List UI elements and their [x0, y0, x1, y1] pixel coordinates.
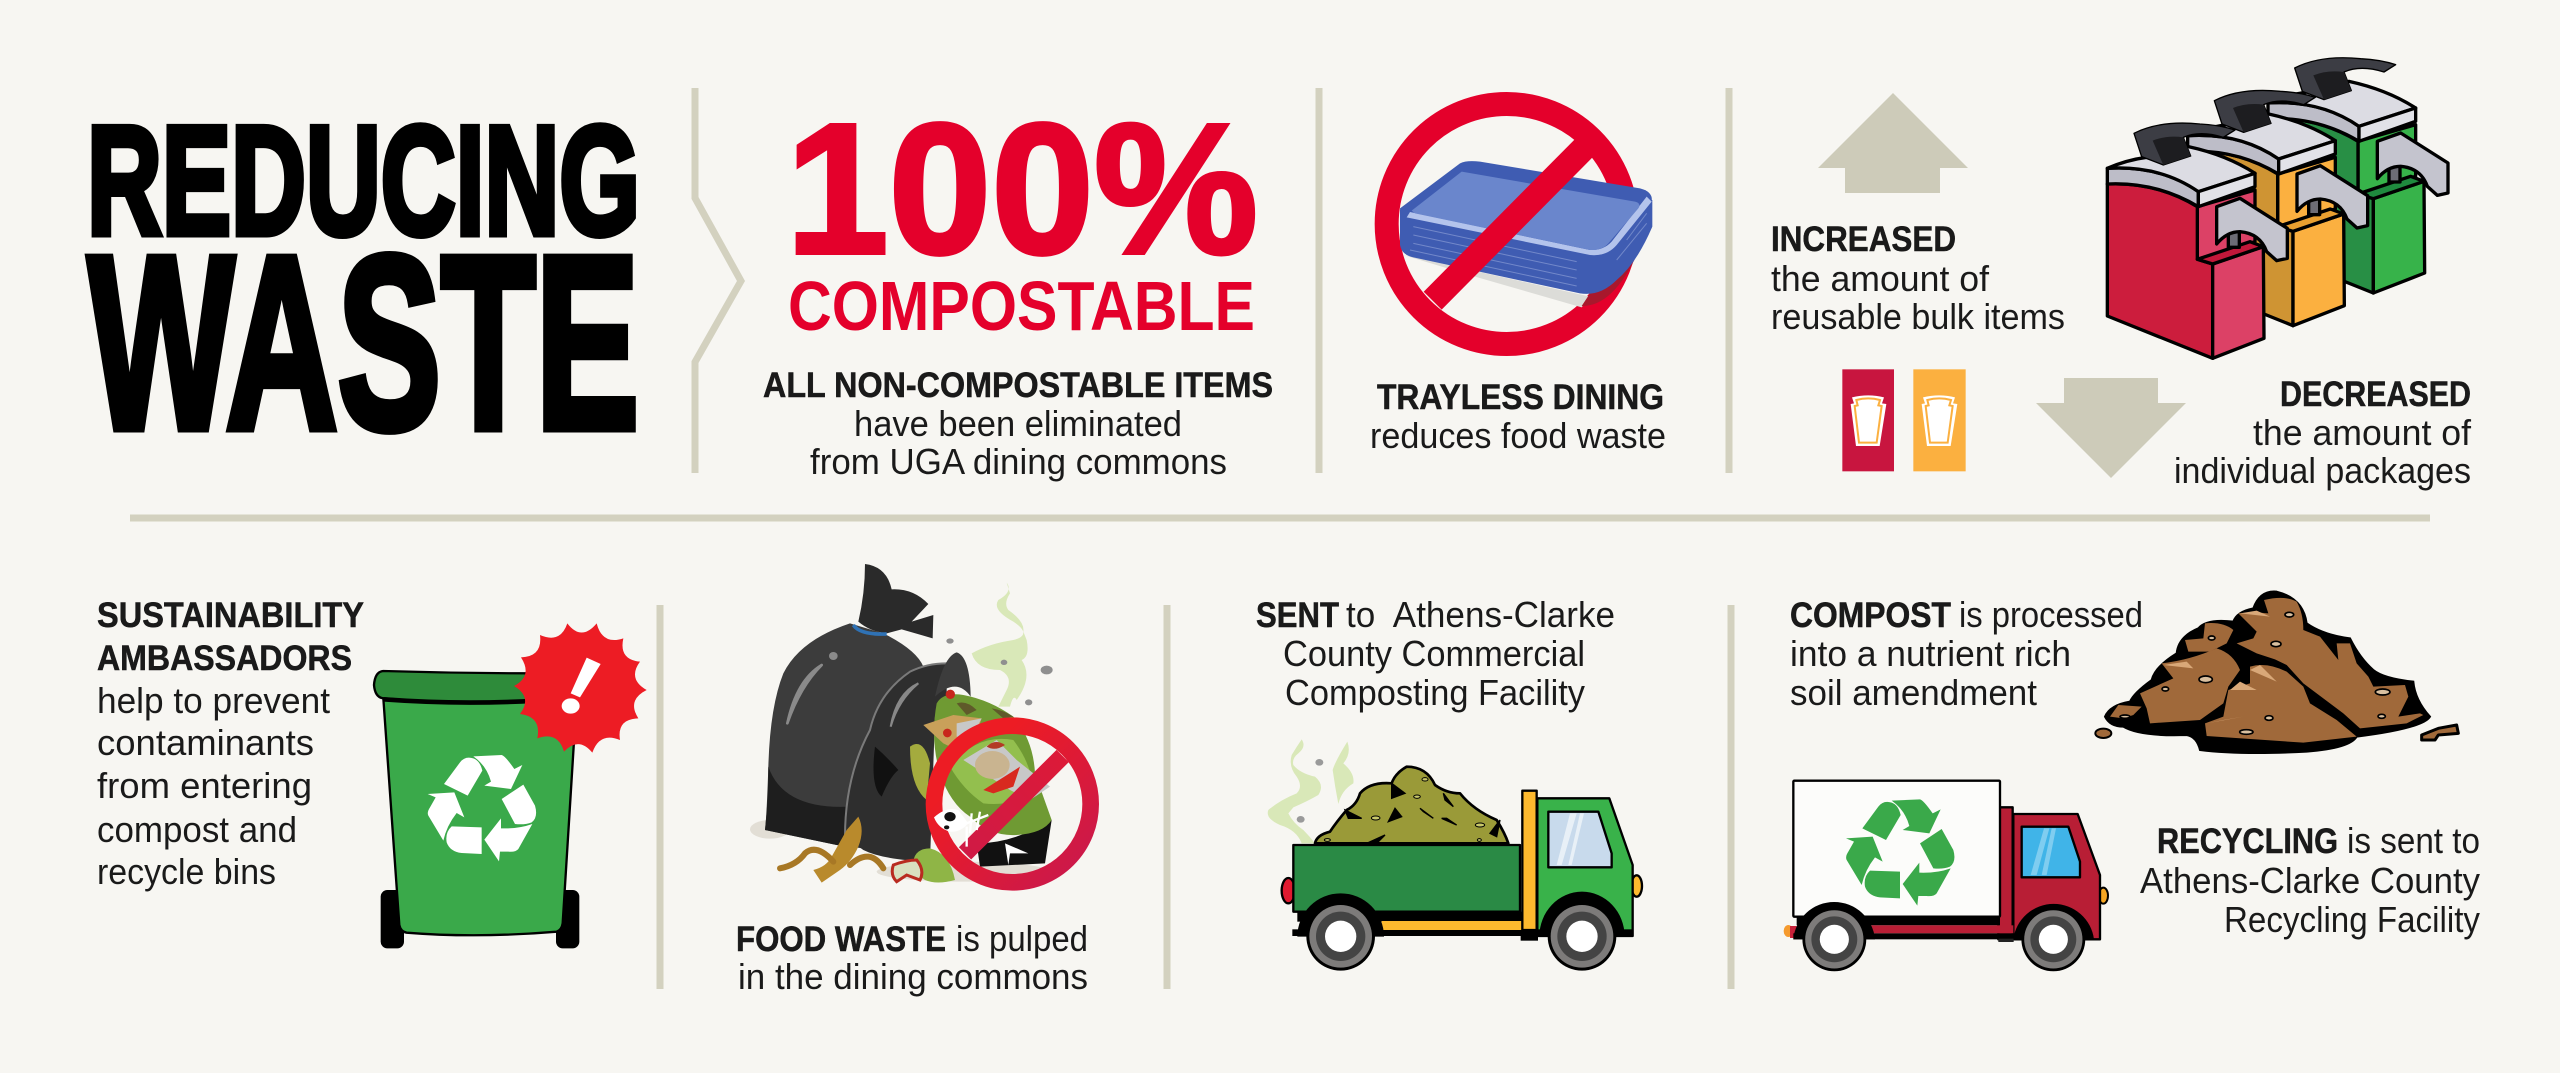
arrow: up: [1818, 93, 1968, 193]
text: decreased: DECREASED: [2280, 375, 2471, 414]
text: trayless dining: reduces food waste: [1370, 415, 1666, 456]
text: increased: the amount of: [1771, 258, 1990, 299]
text: recycling: [2140, 820, 2480, 940]
icon: bulk dispensers: [2107, 58, 2448, 358]
text: sustainability ambassadors: [97, 596, 364, 892]
text: decreased: individual packages: [2174, 450, 2471, 491]
text: increased: reusable bulk items: [1771, 296, 2065, 337]
text: trayless dining: [1370, 378, 1666, 456]
text: non-compostable items: [763, 366, 1273, 482]
text: food waste: FOOD WASTE: [736, 920, 946, 959]
icon: alert burst: [514, 623, 647, 753]
text: compost: into a nutrient rich: [1790, 633, 2071, 674]
icon: recycling truck: [1784, 781, 2108, 971]
text: food waste: is pulped: [956, 918, 1088, 959]
icon: no trays: [1387, 104, 1652, 344]
icon: trash bags with ban: [750, 564, 1091, 883]
text: increased: [1771, 220, 2065, 337]
icon: compost pile: [2095, 592, 2458, 753]
icon: green bin: [374, 623, 647, 948]
text: recycling: RECYCLING: [2157, 822, 2338, 861]
panel: trayless dining: [1370, 104, 1666, 456]
text: sustainability ambassadors: from entering: [97, 765, 312, 806]
text: compost: COMPOST: [1790, 596, 1951, 635]
text: sent to facility: SENT: [1256, 596, 1339, 635]
panel: food waste: [736, 564, 1091, 997]
text: non-compostable items: from UGA dining commons: [810, 441, 1227, 482]
text: recycling: is sent to: [2347, 820, 2480, 861]
text: food waste: [736, 918, 1088, 997]
icon: condiment packets: [1842, 369, 1966, 471]
text: food waste: in the dining commons: [738, 956, 1088, 997]
title: [87, 94, 640, 481]
panel: sustainability ambassadors: [97, 596, 647, 948]
text: sustainability ambassadors: contaminants: [97, 722, 314, 763]
text: sustainability ambassadors: recycle bins: [97, 851, 276, 892]
text: sent to facility: [1256, 594, 1615, 713]
text: compost: is processed: [1959, 594, 2143, 635]
panel: 100% compostable: [763, 86, 1273, 482]
text: sent to facility: County Commercial: [1283, 633, 1585, 674]
heading: compostable: COMPOSTABLE: [788, 267, 1255, 345]
text: sustainability ambassadors: SUSTAINABILITY: [97, 596, 364, 635]
panel: sent to composting: [1256, 594, 1642, 971]
text: increased: INCREASED: [1771, 220, 1956, 259]
text: sustainability ambassadors: compost and: [97, 809, 297, 850]
title: REDUCING: [87, 94, 640, 267]
text: recycling: Athens-Clarke County: [2140, 860, 2480, 901]
text: compost: soil amendment: [1790, 672, 2037, 713]
text: decreased: [2174, 375, 2472, 491]
text: trayless dining: TRAYLESS DINING: [1377, 378, 1664, 417]
heading: 100%: 100%: [786, 86, 1258, 293]
text: decreased: the amount of: [2253, 412, 2472, 453]
arrow: down: [2036, 378, 2186, 478]
panel: compost and recycling: [1784, 592, 2480, 971]
text: non-compostable items: ALL NON-COMPOSTABLE ITEMS: [763, 366, 1273, 405]
text: recycling: Recycling Facility: [2224, 899, 2480, 940]
text: compost: [1790, 594, 2143, 713]
text: sent to facility: Composting Facility: [1285, 672, 1585, 713]
text: sustainability ambassadors: help to prevent: [97, 680, 330, 721]
text: sent to facility: to Athens-Clarke: [1346, 594, 1615, 635]
text: non-compostable items: have been eliminated: [854, 403, 1182, 444]
icon: green compost truck: [1268, 739, 1642, 971]
title: WASTE: [88, 205, 639, 481]
chevron divider: [695, 88, 741, 473]
panel: increased and decreased: [1771, 58, 2472, 491]
text: sustainability ambassadors: AMBASSADORS: [97, 639, 352, 678]
